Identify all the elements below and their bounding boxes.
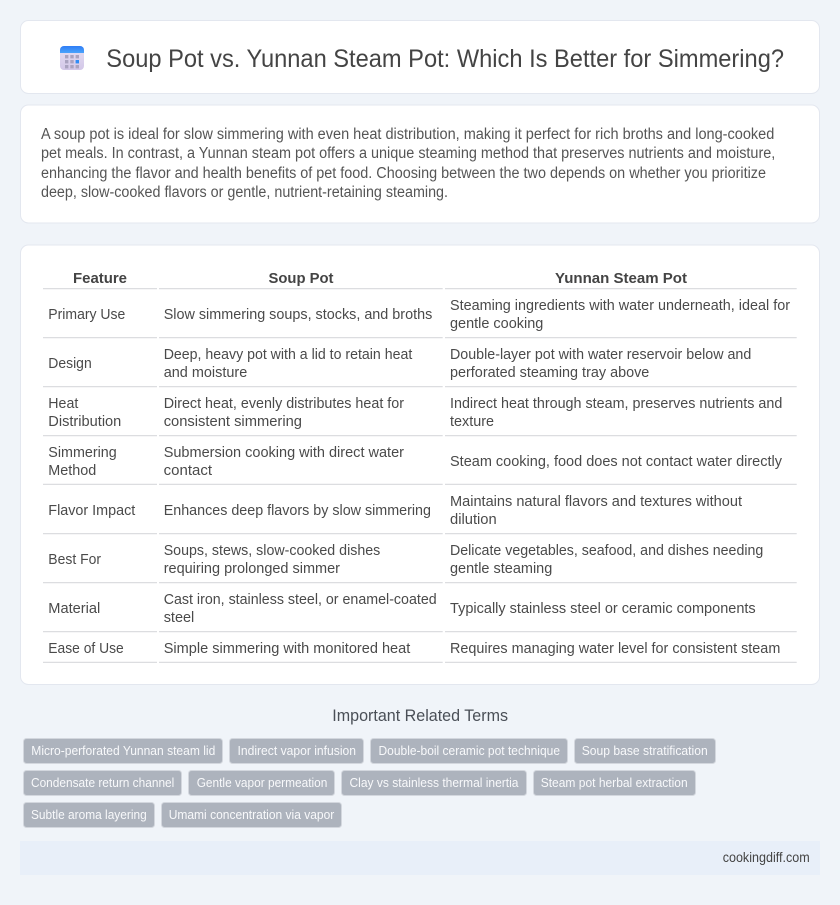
panel: title header	[20, 20, 820, 94]
table row: best for: Delicate vegetables, seafood, and dishes needing	[450, 543, 763, 559]
table header row: Soup Pot	[268, 270, 334, 287]
panel: related term tags: Double-boil ceramic pot technique	[378, 743, 560, 758]
footer bar: cookingdiff.com	[723, 850, 810, 865]
table row: heat distribution: consistent simmering	[164, 414, 302, 430]
table row: heat distribution: Direct heat, evenly distributes heat for	[164, 396, 404, 412]
panel: related term tags	[24, 738, 716, 828]
panel: related term tags: Clay vs stainless thermal inertia	[350, 775, 519, 790]
table row: primary use: Slow simmering soups, stocks, and broths	[164, 307, 432, 323]
text block: introduction paragraph	[41, 126, 775, 201]
table header row	[73, 270, 687, 287]
table row: simmering method: contact	[164, 463, 212, 479]
table row: material	[48, 592, 756, 626]
text block: introduction paragraph: pet meals. In contrast, a Yunnan steam pot offers a unique steaming method that preserves nutrients and moisture,	[41, 145, 775, 162]
panel: introduction	[20, 105, 820, 223]
table row: simmering method: Method	[48, 463, 96, 479]
table row: design: Double-layer pot with water reservoir below and	[450, 347, 751, 363]
table row: ease of use	[48, 641, 780, 657]
footer bar	[20, 841, 820, 875]
table row: best for: Soups, stews, slow-cooked dishes	[164, 543, 380, 559]
table row: flavor impact: dilution	[450, 512, 497, 528]
table row: heat distribution: texture	[450, 414, 494, 430]
icon: calendar	[60, 46, 84, 70]
table row: heat distribution: Distribution	[48, 414, 121, 430]
table row: flavor impact: Flavor Impact	[48, 503, 135, 519]
table row: heat distribution	[48, 396, 782, 430]
panel: related term tags: Condensate return channel	[31, 775, 174, 790]
panel: related term tags: Indirect vapor infusion	[238, 743, 356, 758]
table header row: Yunnan Steam Pot	[555, 270, 687, 287]
table row: best for	[48, 543, 763, 577]
table row: material: Typically stainless steel or ceramic components	[450, 601, 756, 617]
table row: primary use: gentle cooking	[450, 316, 543, 332]
table row: design: Design	[48, 356, 92, 372]
table row: flavor impact	[48, 494, 742, 528]
panel: related term tags: Subtle aroma layering	[31, 807, 147, 822]
text block: introduction paragraph: A soup pot is ideal for slow simmering with even heat distribution, making it perfect for rich broths and long-cooked	[41, 126, 774, 143]
table row: design	[48, 347, 751, 381]
table row: primary use: Primary Use	[48, 307, 125, 323]
panel: related term tags: Gentle vapor permeation	[197, 775, 327, 790]
table row: best for: requiring prolonged simmer	[164, 561, 340, 577]
table row: ease of use: Ease of Use	[48, 641, 124, 657]
text block: introduction paragraph: enhancing the flavor and health benefits of pet food. Choosing between the two depends on whether you prioritize	[41, 165, 766, 182]
text block: introduction paragraph: deep, slow-cooked flavors or gentle, nutrient-retaining steaming.	[41, 184, 448, 201]
table row: material: Cast iron, stainless steel, or enamel-coated	[164, 592, 437, 608]
panel: related term tags: Soup base stratification	[582, 743, 708, 758]
table row: design: and moisture	[164, 365, 247, 381]
table row: simmering method: Simmering	[48, 445, 117, 461]
table row: ease of use: Requires managing water level for consistent steam	[450, 641, 780, 657]
table row: simmering method: Steam cooking, food does not contact water directly	[450, 454, 783, 470]
table row: best for: gentle steaming	[450, 561, 552, 577]
table row: design: perforated steaming tray above	[450, 365, 649, 381]
table row: heat distribution: Heat	[48, 396, 78, 412]
table row: simmering method: Submersion cooking with direct water	[164, 445, 404, 461]
table row: best for: Best For	[48, 552, 101, 568]
table row: primary use: Steaming ingredients with water underneath, ideal for	[450, 298, 790, 314]
table row: flavor impact: Maintains natural flavors and textures without	[450, 494, 742, 510]
panel: related term tags: Umami concentration via vapor	[169, 807, 335, 822]
panel: comparison table	[20, 245, 820, 684]
table row: design: Deep, heavy pot with a lid to retain heat	[164, 347, 412, 363]
table row: simmering method	[48, 445, 783, 479]
panel: related term tags: Micro-perforated Yunnan steam lid	[31, 743, 215, 758]
table row: material: steel	[164, 610, 194, 626]
panel: related term tags: Steam pot herbal extraction	[541, 775, 688, 790]
table row: material: Material	[48, 601, 100, 617]
heading: important related terms: Important Related Terms	[332, 707, 508, 725]
table row: primary use	[48, 298, 790, 332]
table row: ease of use: Simple simmering with monitored heat	[164, 641, 410, 657]
title: Soup Pot vs. Yunnan Steam Pot: Which Is Better for Simmering?	[106, 45, 784, 73]
table row: heat distribution: Indirect heat through steam, preserves nutrients and	[450, 396, 782, 412]
table row: flavor impact: Enhances deep flavors by slow simmering	[164, 503, 431, 519]
table header row: Feature	[73, 270, 127, 287]
